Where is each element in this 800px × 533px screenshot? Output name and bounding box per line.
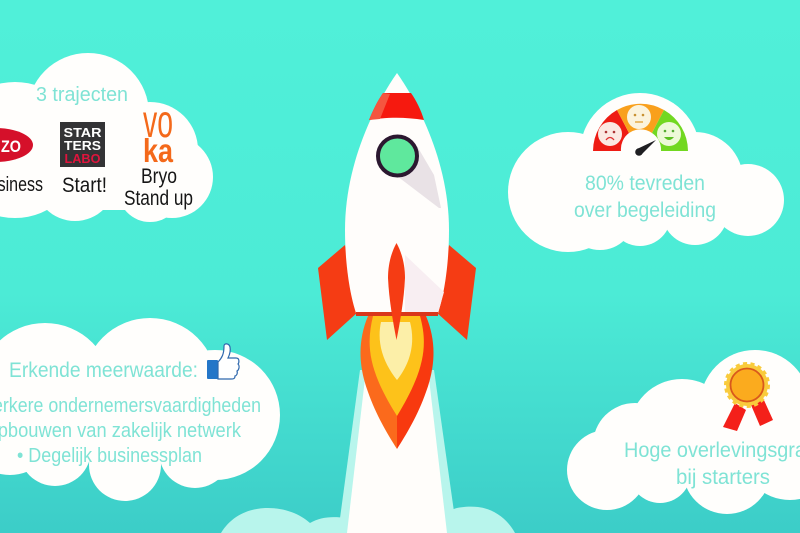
bottom rim — [356, 312, 438, 316]
logo: unizo: ZO — [1, 137, 21, 156]
rocket — [318, 73, 476, 449]
survival text: bij starters — [676, 466, 770, 489]
satisfaction text — [574, 172, 716, 222]
panel: overlevingsgraad cloud — [567, 350, 800, 514]
logo: starters labo: TERS — [64, 138, 101, 153]
centre fin — [388, 243, 405, 340]
panel: tevredenheid cloud — [508, 93, 784, 252]
logo: voka: ka — [143, 132, 174, 169]
label: bryo stand up — [124, 165, 193, 210]
face: sad — [598, 122, 622, 146]
logo: starters labo: STAR — [64, 125, 102, 140]
label: bryo stand up: Bryo — [141, 165, 177, 188]
bullet list: • Degelijk businessplan — [17, 445, 202, 467]
heading: Erkende meerwaarde: — [9, 359, 198, 382]
flame — [360, 316, 434, 449]
logo: voka: vo — [143, 95, 173, 147]
face: neutral — [627, 105, 651, 129]
gauge orange segment — [617, 104, 664, 133]
heading: 3 trajecten — [36, 84, 128, 106]
left fin — [318, 245, 358, 340]
logo: starters labo: LABO — [64, 151, 100, 166]
panel: erkende meerwaarde cloud — [0, 318, 280, 501]
window shadow — [397, 146, 441, 208]
cloud shape — [567, 350, 800, 514]
exhaust trail — [338, 370, 457, 533]
nose cone band — [369, 93, 424, 120]
cloud shape — [0, 53, 213, 222]
logo: starters labo — [60, 122, 105, 167]
cloud shape — [508, 93, 784, 252]
logo: voka — [143, 95, 174, 169]
satisfaction text: 80% tevreden — [585, 172, 705, 195]
gauge red segment — [593, 110, 629, 151]
nose band highlight — [369, 93, 390, 120]
bottom cloud — [221, 507, 515, 533]
panel: 3 trajecten cloud — [0, 53, 213, 222]
satisfaction text: over begeleiding — [574, 199, 716, 222]
survival text — [624, 439, 800, 489]
face: happy — [657, 122, 681, 146]
right fin — [436, 245, 476, 340]
logo: unizo — [0, 128, 33, 162]
porthole window — [378, 136, 417, 176]
gauge green segment — [652, 110, 688, 151]
gauge — [593, 104, 688, 156]
bullet list — [0, 395, 261, 467]
rocket body — [345, 73, 449, 313]
cloud shape — [0, 318, 280, 501]
icon: thumbs up — [207, 344, 239, 379]
label: start: Start! — [62, 174, 107, 197]
lower body shading — [405, 255, 444, 313]
label: bryo stand up: Stand up — [124, 187, 193, 210]
ribbons — [723, 403, 746, 431]
icon: medal — [723, 364, 773, 431]
needle — [635, 140, 656, 156]
